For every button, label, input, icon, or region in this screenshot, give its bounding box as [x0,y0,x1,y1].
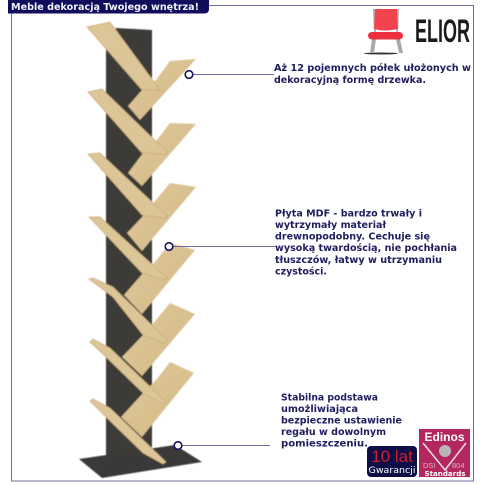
callout: MDF material: drewnopodobny. Cechuje się [275,232,430,242]
callout: MDF material [165,208,457,278]
callout: MDF material: tłuszczów, łatwy w utrzymaniu [275,255,442,266]
callout: stable base: umożliwiająca [281,404,358,415]
icon: red chair [364,9,403,54]
callout: MDF material: Płyta MDF - bardzo trwały i [275,208,422,220]
bookshelf product image [79,22,202,478]
callout: stable base [174,392,402,450]
left shelves [87,22,168,464]
badge: 10 years warranty: 10 lat [371,447,413,466]
badge: 10 years warranty: Gwarancji [368,465,416,475]
callout: MDF material: wysoką twardością, nie pochłania [275,243,457,254]
badge: Edinos DSI 804 standards [419,429,470,478]
badge: 10 years warranty [367,446,417,477]
base plate [79,445,202,478]
callout: shelves: Aż 12 pojemnych półek ułożonych w [274,63,471,74]
right shelves [121,59,196,437]
badge: Edinos DSI 804 standards: Edinos [424,430,465,444]
callout: MDF material: czystości. [275,266,327,278]
callout: shelves: dekoracyjną formę drzewka. [274,75,426,86]
callout: stable base: Stabilna podstawa [281,392,378,404]
callout: MDF material: wytrzymały materiał [275,220,387,231]
callout: stable base: pomieszczeniu. [281,438,368,450]
callout: shelves [185,63,471,86]
badge: Edinos DSI 804 standards: 804 [452,461,465,470]
callout: stable base: regału w dowolnym [281,427,386,438]
back board [106,28,152,455]
callout: stable base: bezpieczne ustawienie [281,416,402,426]
badge: Edinos DSI 804 standards: Standards [424,470,466,478]
badge: Edinos DSI 804 standards: DSI [423,461,436,470]
header banner: Meble dekoracją Twojego wnętrza! [11,2,199,13]
